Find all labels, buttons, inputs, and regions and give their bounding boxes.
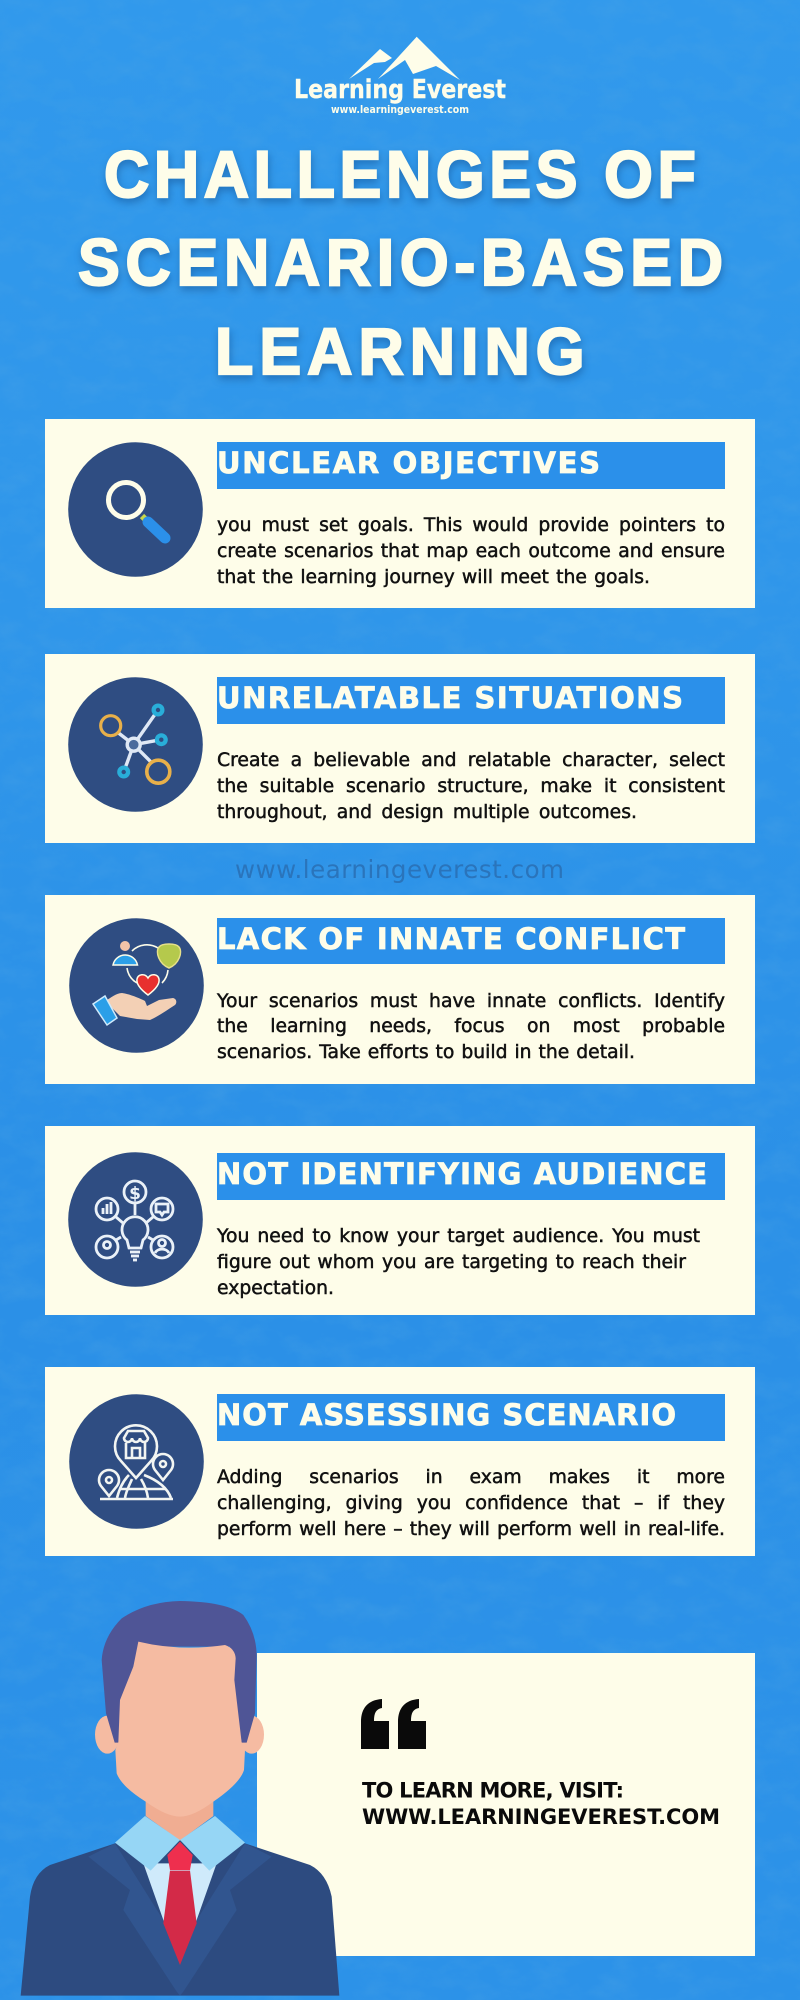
- text: unrelatable situations body: the suitable scenario structure, make it consistent: [217, 776, 725, 797]
- logo: Learning Everest: www.learningeverest.com: [331, 103, 469, 116]
- face: [115, 1642, 245, 1817]
- tie: [163, 1842, 197, 1965]
- text: not identifying audience body: expectation.: [217, 1278, 334, 1299]
- panel: unrelatable situations: [45, 654, 755, 843]
- text: not assessing scenario body: Adding scenarios in exam makes it more: [217, 1467, 725, 1488]
- heading: unclear objectives: [217, 442, 725, 488]
- heading: lack of innate conflict: [217, 918, 725, 964]
- text: unrelatable situations body: throughout, and design multiple outcomes.: [217, 802, 637, 823]
- neck: [146, 1797, 213, 1841]
- heading: not assessing scenario: [217, 1394, 725, 1441]
- icon: shop and map pins on globe: [69, 1394, 204, 1529]
- text: lack of innate conflict body: Your scenarios must have innate conflicts. Identify: [217, 991, 725, 1012]
- collar: [115, 1816, 245, 1871]
- text: not identifying audience body: [216, 1226, 700, 1299]
- illustration: businessman: [20, 1601, 340, 1996]
- text: not identifying audience body: You need to know your target audience. You must: [217, 1226, 700, 1247]
- text: visit website: WWW.LEARNINGEVEREST.COM: [362, 1805, 720, 1829]
- text: visit website: TO LEARN MORE, VISIT:: [362, 1779, 624, 1803]
- panel: lack of innate conflict: [45, 895, 755, 1084]
- icon: quotation mark: [361, 1699, 426, 1749]
- title: [78, 138, 726, 388]
- lapels: [88, 1843, 272, 1996]
- text: lack of innate conflict body: the learning needs, focus on most probable: [217, 1016, 725, 1037]
- heading: unrelatable situations: [217, 677, 725, 724]
- ears: [95, 1716, 264, 1754]
- text: unrelatable situations body: [217, 750, 725, 823]
- text: unrelatable situations body: Create a believable and relatable character, select: [217, 750, 725, 771]
- text: not identifying audience body: figure out whom you are targeting to reach their: [217, 1252, 686, 1273]
- panel: call to action: [257, 1653, 755, 1956]
- hair: [102, 1601, 257, 1743]
- heading: lack of innate conflict: LACK OF INNATE CONFLICT: [217, 922, 685, 956]
- title: SCENARIO-BASED: [78, 226, 723, 299]
- watermark url: www.learningeverest.com: [235, 855, 564, 884]
- text: unclear objectives body: create scenarios that map each outcome and ensure: [217, 541, 725, 562]
- text: not assessing scenario body: perform well here – they will perform well in real-life.: [217, 1519, 725, 1540]
- text: unclear objectives body: [217, 515, 725, 588]
- logo: Learning Everest: [294, 36, 506, 116]
- heading: not assessing scenario: NOT ASSESSING SCENARIO: [217, 1398, 676, 1432]
- shirt: [143, 1863, 217, 1963]
- icon: bulb with business circles: $: [129, 1184, 141, 1204]
- heading: not identifying audience: NOT IDENTIFYING AUDIENCE: [217, 1157, 707, 1191]
- text: lack of innate conflict body: [216, 991, 725, 1063]
- title: LEARNING: [215, 315, 585, 388]
- text: unclear objectives body: you must set goals. This would provide pointers to: [217, 515, 725, 536]
- icon: bulb with business circles: [68, 1152, 203, 1287]
- text: unclear objectives body: that the learning journey will meet the goals.: [217, 567, 650, 588]
- suit: [21, 1833, 339, 1996]
- text: lack of innate conflict body: scenarios. Take efforts to build in the detail.: [217, 1042, 635, 1063]
- icon: network nodes: [68, 677, 203, 812]
- heading: unclear objectives: UNCLEAR OBJECTIVES: [217, 446, 600, 480]
- heading: unrelatable situations: UNRELATABLE SITUATIONS: [217, 681, 683, 715]
- title: CHALLENGES OF: [104, 138, 696, 211]
- text: not assessing scenario body: challenging, giving you confidence that – if they: [217, 1493, 725, 1514]
- icon: hand with heart: [69, 918, 204, 1053]
- text: not assessing scenario body: [216, 1467, 725, 1540]
- text: visit website: [362, 1779, 720, 1829]
- icon: magnifying glass: [68, 442, 203, 577]
- panel: not assessing scenario: [45, 1367, 755, 1556]
- panel: unclear objectives: [45, 419, 755, 608]
- panel: not identifying audience: [45, 1126, 755, 1315]
